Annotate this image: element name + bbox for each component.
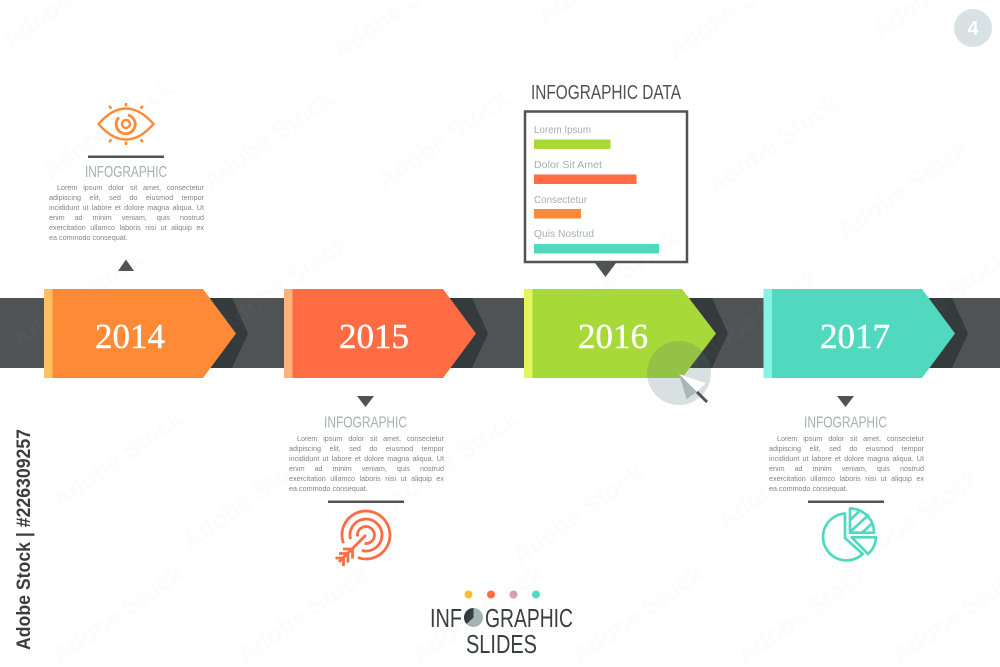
watermark pattern: Adobe Stock bbox=[197, 84, 339, 195]
text block 2015: enim ad minim veniam, quis nostrud bbox=[289, 464, 444, 473]
text block 2017: Lorem ipsum dolor sit amet, consectetur bbox=[777, 434, 924, 443]
data panel bbox=[525, 112, 687, 277]
step 2015 arrow bbox=[284, 289, 488, 378]
icon: cursor click bbox=[647, 341, 711, 405]
bar: Consectetur bbox=[534, 195, 588, 218]
text block 2014: enim ad minim veniam, quis nostrud bbox=[49, 213, 204, 222]
text block 2014: exercitation ullamco laboris nisi ut aliquip ex bbox=[49, 223, 204, 232]
watermark pattern: Adobe Stock bbox=[372, 84, 514, 195]
logo: infographic slides bbox=[430, 590, 573, 659]
text block 2014 bbox=[49, 183, 204, 242]
bar: Lorem Ipsum: Lorem Ipsum bbox=[534, 125, 591, 136]
step 2016 arrow bbox=[524, 289, 728, 378]
text block 2017: ea commodo consequat. bbox=[769, 484, 848, 493]
watermark pattern: Adobe Stock bbox=[7, 244, 149, 355]
icon: pie chart bbox=[823, 508, 876, 560]
watermark pattern: Adobe Stock bbox=[177, 444, 319, 555]
heading 2014: INFOGRAPHIC bbox=[85, 164, 167, 181]
step 2017 arrow bbox=[764, 289, 968, 378]
watermark pattern: Adobe Stock bbox=[542, 224, 684, 335]
heading 2015: INFOGRAPHIC bbox=[324, 414, 407, 432]
icon: target with arrow bbox=[336, 511, 390, 566]
step 2015 arrow: 2015 bbox=[339, 317, 409, 356]
watermark pattern: Adobe Stock bbox=[832, 134, 974, 245]
pointer 2015 bbox=[357, 396, 374, 407]
text block 2014: Lorem ipsum dolor sit amet, consectetur bbox=[57, 183, 204, 192]
text block 2017: incididunt ut labore et dolore magna aliqua. Ut bbox=[769, 454, 924, 463]
divider 2017 bbox=[808, 500, 884, 503]
bar: Dolor Sit Amet: Dolor Sit Amet bbox=[534, 160, 602, 171]
text block 2017: exercitation ullamco laboris nisi ut aliquip ex bbox=[769, 474, 924, 483]
watermark pattern: Adobe Stock bbox=[702, 89, 844, 200]
watermark pattern: Adobe Stock bbox=[212, 229, 354, 340]
watermark pattern: Adobe Stock bbox=[842, 464, 984, 575]
pointer 2017 bbox=[837, 396, 854, 407]
logo: infographic slides: SLIDES bbox=[466, 629, 537, 659]
text block 2014: adipiscing elit, sed do eiusmod tempor bbox=[49, 193, 204, 202]
pointer 2014 bbox=[118, 260, 134, 271]
watermark pattern: Adobe Stock bbox=[732, 559, 874, 667]
text block 2014: ea commodo consequat. bbox=[49, 233, 128, 242]
data panel title: INFOGRAPHIC DATA bbox=[531, 81, 681, 104]
watermark pattern: Adobe Stock bbox=[712, 424, 854, 535]
step 2016 arrow: 2016 bbox=[578, 317, 648, 356]
watermark pattern: Adobe Stock bbox=[37, 74, 179, 185]
bar: Quis Nostrud: Quis Nostrud bbox=[534, 229, 594, 240]
step 2014 arrow: 2014 bbox=[95, 317, 165, 356]
timeline band bbox=[0, 298, 1000, 368]
text block 2015: adipiscing elit, sed do eiusmod tempor bbox=[289, 444, 444, 453]
text block 2015: Lorem ipsum dolor sit amet, consectetur bbox=[297, 434, 444, 443]
step 2017 arrow: 2017 bbox=[820, 317, 890, 356]
text block 2015 bbox=[289, 434, 444, 493]
logo: infographic slides: INF bbox=[430, 603, 462, 633]
watermark pattern: Adobe Stock bbox=[382, 404, 524, 515]
stock id label: Adobe Stock | #226309257 bbox=[14, 429, 35, 650]
bar: Lorem Ipsum bbox=[534, 125, 610, 149]
text block 2017: enim ad minim veniam, quis nostrud bbox=[769, 464, 924, 473]
text block 2015: exercitation ullamco laboris nisi ut aliquip ex bbox=[289, 474, 444, 483]
divider 2014 bbox=[88, 156, 164, 158]
text block 2017 bbox=[769, 434, 924, 493]
step 2014 arrow bbox=[44, 289, 248, 378]
watermark pattern: Adobe Stock bbox=[232, 559, 374, 667]
watermark pattern: Adobe Stock bbox=[47, 559, 189, 667]
watermark pattern: Adobe Stock bbox=[567, 559, 709, 667]
icon: eye bbox=[98, 103, 154, 145]
text block 2015: ea commodo consequat. bbox=[289, 484, 368, 493]
watermark pattern: Adobe Stock bbox=[682, 264, 824, 375]
badge: number 4 bbox=[954, 9, 992, 47]
watermark pattern: Adobe Stock bbox=[507, 459, 649, 570]
bar: Quis Nostrud bbox=[534, 229, 659, 254]
divider 2015 bbox=[328, 500, 404, 503]
heading 2017: INFOGRAPHIC bbox=[804, 414, 887, 432]
bar: Dolor Sit Amet bbox=[534, 160, 636, 184]
logo: infographic slides: GRAPHIC bbox=[485, 603, 573, 633]
text block 2015: incididunt ut labore et dolore magna aliqua. Ut bbox=[289, 454, 444, 463]
badge: number 4: 4 bbox=[967, 18, 979, 40]
watermark pattern: Adobe Stock bbox=[407, 559, 549, 667]
text block 2017: adipiscing elit, sed do eiusmod tempor bbox=[769, 444, 924, 453]
bar: Consectetur: Consectetur bbox=[534, 195, 588, 206]
text block 2014: incididunt ut labore et dolore magna aliqua. Ut bbox=[49, 203, 204, 212]
watermark pattern: Adobe Stock bbox=[47, 404, 189, 515]
